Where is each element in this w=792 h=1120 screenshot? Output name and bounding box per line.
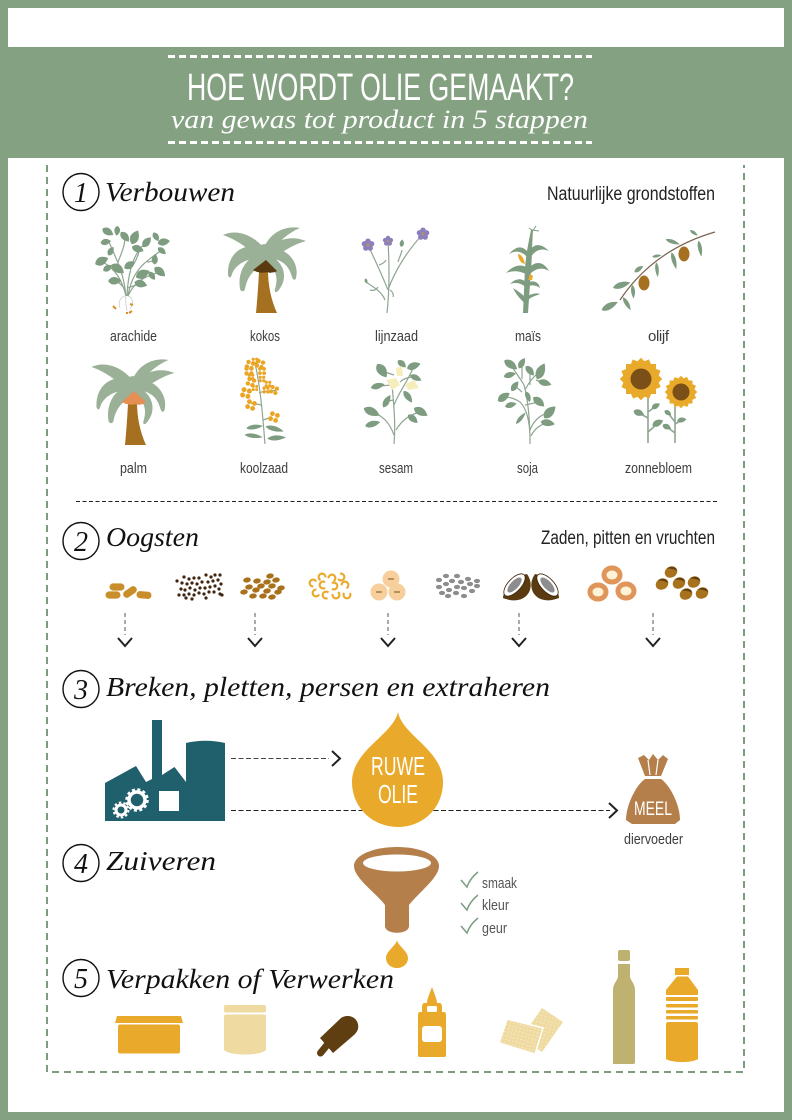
plant: koolzaad — [240, 358, 286, 444]
section 5: heading — [63, 960, 394, 996]
label: soja: soja — [517, 460, 538, 477]
label: palm: palm — [120, 460, 147, 477]
section 3: heading: 3 — [73, 675, 88, 706]
seeds: donkere korrels — [175, 573, 224, 601]
label: sesam: sesam — [379, 460, 413, 477]
plant: zonnebloem — [620, 358, 697, 443]
section 4: heading — [63, 844, 216, 882]
plant: arachide — [93, 225, 170, 313]
icon: funnel — [354, 847, 439, 933]
arrow: factory to crude oil — [231, 751, 340, 766]
seeds: palmringen — [590, 568, 634, 599]
section 2: heading — [63, 522, 199, 560]
plant: lijnzaad — [362, 227, 429, 313]
checklist: smaak — [482, 875, 517, 892]
icon: small drop — [386, 940, 408, 968]
section 4: heading: Zuiveren — [106, 846, 216, 876]
title: HOE WORDT OLIE GEMAAKT? — [187, 67, 574, 109]
product: sauce bottle — [418, 987, 446, 1057]
icon: meel bag — [626, 754, 680, 824]
section 4: heading: 4 — [74, 849, 88, 880]
product: glass oil bottle — [613, 950, 635, 1064]
plant: sesam — [362, 358, 430, 444]
label: kokos: kokos — [250, 328, 280, 345]
section 5: heading: Verpakken of Verwerken — [106, 964, 394, 994]
label: arachide: arachide — [110, 328, 157, 345]
drop: ruwe olie: RUWE — [371, 751, 425, 781]
section 1: subheading: Natuurlijke grondstoffen — [547, 184, 715, 205]
arrows: step 2 to step 3 — [118, 613, 660, 646]
checklist: geur — [482, 920, 507, 937]
icon: factory — [105, 720, 225, 821]
plant: olijf — [600, 229, 715, 313]
section 3: heading: Breken, pletten, persen en extraheren — [106, 672, 550, 702]
label: diervoeder: diervoeder — [624, 831, 683, 848]
section 2: heading: 2 — [74, 527, 88, 558]
seeds: hazelnoten — [654, 564, 710, 602]
section 2: subheading: Zaden, pitten en vruchten — [541, 528, 715, 549]
seeds: bruine zaden — [240, 573, 285, 600]
section 1: heading: 1 — [74, 178, 88, 209]
section 2: heading: Oogsten — [106, 522, 199, 552]
seeds: soja — [370, 570, 406, 600]
section 1: heading — [63, 174, 235, 210]
plant: maïs — [506, 226, 549, 313]
seeds: maïs — [308, 572, 350, 599]
product: jar — [224, 1005, 266, 1054]
section 1: heading: Verbouwen — [105, 177, 235, 207]
drop: ruwe olie — [352, 712, 443, 827]
product: ice lolly — [320, 1016, 358, 1053]
plant: soja — [496, 356, 558, 444]
arrow: factory to meal — [231, 803, 617, 818]
label: maïs: maïs — [515, 328, 541, 345]
checklist — [461, 872, 517, 937]
label: koolzaad: koolzaad — [240, 460, 288, 477]
checklist: kleur — [482, 897, 509, 914]
label: zonnebloem: zonnebloem — [625, 460, 692, 477]
product: margarine tub — [115, 1016, 183, 1054]
section 3: heading — [63, 670, 550, 708]
seeds: grijs — [436, 574, 480, 598]
icon: meel bag: MEEL — [634, 799, 672, 820]
seeds: pinda — [106, 583, 152, 599]
label: lijnzaad: lijnzaad — [375, 328, 418, 345]
plant: kokos — [223, 227, 306, 313]
title block — [168, 56, 592, 142]
label: olijf: olijf — [648, 328, 670, 345]
seeds: kokos — [500, 570, 562, 600]
section 5: heading: 5 — [74, 964, 88, 995]
subtitle: van gewas tot product in 5 stappen — [171, 105, 588, 134]
product: plastic oil bottle — [666, 968, 698, 1062]
plant: palm — [92, 359, 174, 445]
drop: ruwe olie: OLIE — [378, 779, 418, 809]
product: crackers — [499, 1008, 563, 1054]
